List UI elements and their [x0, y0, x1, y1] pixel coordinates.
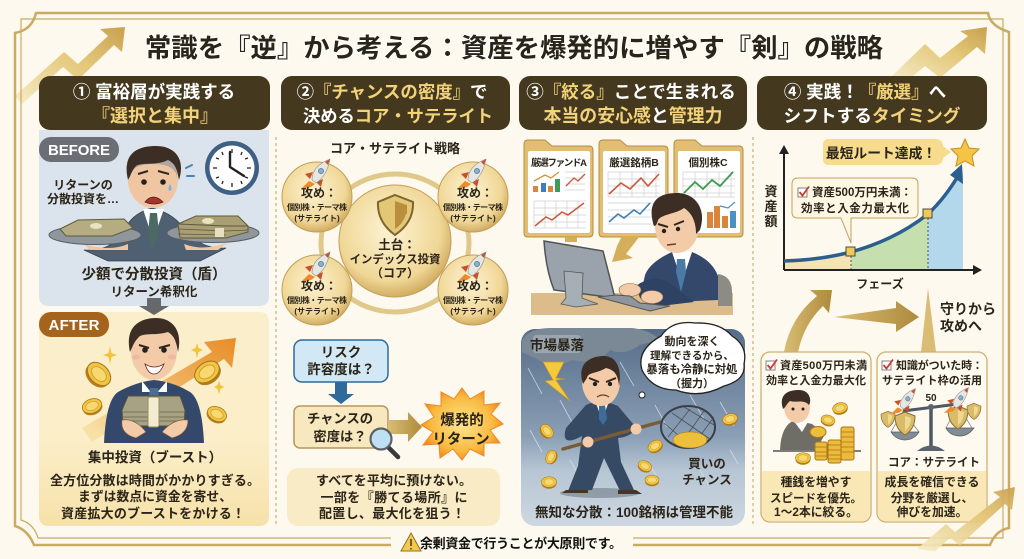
arrow: to explosive return [388, 412, 422, 442]
badge: after: AFTER [48, 317, 100, 334]
icon: magnifier [370, 428, 398, 457]
panel 1 header: 『選択と集中』 [92, 106, 218, 126]
burst: explosive return: リターン [432, 431, 490, 448]
keyboard [598, 295, 670, 311]
satellite top left: 個別株・テーマ株 [287, 202, 347, 212]
man with net [560, 356, 660, 498]
monitor [544, 241, 615, 307]
callout [792, 178, 918, 243]
folder A: 厳選ファンドA [531, 157, 587, 169]
caption box [287, 468, 500, 526]
folder C [674, 140, 743, 237]
box: risk tolerance [294, 340, 388, 382]
text: small diversification [82, 265, 226, 299]
satellite bottom right: 個別株・テーマ株 [443, 295, 503, 305]
core circle: 土台： [378, 237, 416, 252]
axis labels: 額 [764, 214, 778, 229]
balance scale: 50 [925, 393, 937, 404]
panel 3: folders and man [524, 140, 743, 315]
badge: after [39, 312, 109, 337]
bottom note: 余剰資金で行うことが大原則です。 [420, 536, 622, 551]
satellite top left [282, 159, 352, 232]
callout: 資産500万円未満： [812, 185, 912, 199]
label: market crash: 市場暴落 [530, 337, 584, 353]
pill: shortest route: 最短ルート達成！ [826, 145, 936, 161]
satellite top right: 個別株・テーマ株 [443, 202, 503, 212]
arrow: before to after [139, 298, 169, 315]
panel 2 header: ②『チャンスの密度』で [297, 82, 487, 102]
folder C: 個別株C [688, 156, 728, 169]
card: under 5M: スピードを優先。 [770, 491, 862, 505]
storm cloud [522, 328, 660, 365]
markers [846, 247, 855, 256]
card: under 5M [761, 352, 871, 522]
card: with knowledge: コア：サテライト [888, 456, 980, 469]
burst: explosive return [421, 388, 503, 460]
label: buying chance: チャンス [682, 473, 732, 487]
box: risk tolerance: 許容度は？ [307, 361, 375, 377]
panel 2 divider [275, 137, 277, 526]
satellite top right [438, 159, 508, 232]
caption box: すべてを平均に預けない。 [316, 473, 472, 488]
icon: star [951, 139, 979, 166]
card: under 5M: 資産500万円未満 [780, 358, 867, 372]
arrow: risk to density [328, 382, 354, 404]
phase fills [784, 252, 851, 270]
falling coins [537, 412, 739, 489]
panel 2 header [281, 76, 510, 130]
label: buying chance: 買いの [688, 457, 726, 471]
axis labels: 資 [764, 184, 778, 199]
rain [528, 355, 738, 484]
bottom note cover [391, 532, 633, 552]
title: 常識を『逆』から考える：資産を爆発的に増やす『剣』の戦略 [145, 33, 884, 63]
thought bubble: 理解できるから、 [650, 349, 734, 362]
caption: 無知な分散：100銘柄は管理不能 [535, 504, 734, 520]
burst: explosive return: 爆発的 [440, 411, 484, 429]
card: with knowledge [877, 352, 987, 522]
panel 4 header: ④ 実践！『厳選』へ [784, 82, 946, 102]
working man [619, 193, 718, 306]
panel 3 header [519, 76, 747, 130]
worried text: リターンの [53, 178, 113, 192]
satellite bottom left [282, 252, 352, 325]
panel 2 header: 決めるコア・サテライト [303, 106, 493, 126]
panel: market crash [521, 323, 745, 526]
worried text [47, 178, 119, 206]
card: with knowledge: 成長を確信できる [885, 475, 979, 489]
satellite top right: 攻め： [457, 185, 493, 200]
thought bubble [639, 323, 745, 398]
card: under 5M: 1〜2本に絞る。 [774, 505, 858, 519]
card: with knowledge: サテライト枠の活用 [882, 373, 982, 387]
folder B: 厳選銘柄B [609, 156, 659, 169]
panel: before [39, 130, 269, 306]
satellite top left: 攻め： [301, 185, 337, 200]
coins and sparkles [80, 343, 229, 426]
curve [784, 176, 958, 261]
connector spike [921, 288, 936, 352]
thought bubble: 動向を深く [664, 334, 720, 348]
satellite bottom left: (サテライト) [294, 307, 340, 316]
text: focus boost: 資産拡大のブーストをかける！ [61, 506, 245, 521]
panel: after [39, 312, 269, 526]
box: chance density: 密度は？ [313, 428, 367, 444]
panel: chart: フェーズ [856, 276, 904, 291]
panel: chart [764, 139, 982, 291]
satellite bottom left: 攻め： [301, 278, 337, 293]
label: defense to offense: 守りから [940, 301, 996, 317]
decorative arrow bottom right [917, 487, 1015, 551]
card: with knowledge: 分野を厳選し、 [891, 491, 973, 505]
box: risk tolerance: リスク [321, 345, 361, 360]
core circle [339, 185, 451, 297]
panel 4 header: シフトするタイミング [784, 105, 961, 126]
rising arrow [82, 338, 236, 442]
badge: before [39, 137, 119, 162]
icon: lightning [543, 362, 570, 401]
arrow: curved up [784, 290, 832, 352]
text: small diversification: 少額で分散投資（盾） [82, 265, 226, 283]
decorative arrow top left [15, 27, 125, 104]
panel 1 header: ① 富裕層が実践する [73, 82, 235, 102]
arrow: folder to monitor [565, 236, 640, 262]
desk [531, 293, 733, 315]
panel 4 divider [752, 137, 754, 526]
icon: clock [205, 141, 259, 195]
folder A [524, 140, 593, 237]
axis labels [764, 184, 778, 229]
worried man [84, 146, 226, 261]
panel 4 header [757, 76, 987, 130]
satellite bottom right [438, 252, 508, 325]
text: small diversification: リターン希釈化 [111, 284, 198, 299]
pill: shortest route [823, 139, 951, 165]
panel 3 header: ③『絞る』ことで生まれる [526, 82, 736, 102]
thought bubble: 暴落も冷静に対処 [646, 362, 738, 376]
card: with knowledge: 伸びを加速。 [897, 505, 967, 519]
core circle: インデックス投資 [350, 252, 441, 266]
label: buying chance [682, 457, 732, 487]
axis labels: 産 [764, 199, 778, 214]
label: defense to offense [940, 301, 996, 334]
satellite bottom left: 個別株・テーマ株 [287, 295, 347, 305]
balance scale [881, 388, 981, 451]
text: focus boost: まずは数点に資金を寄せ、 [78, 489, 232, 504]
chair [718, 274, 732, 306]
card: under 5M: 効率と入金力最大化 [766, 373, 866, 387]
chart title: コア・サテライト戦略 [330, 141, 460, 156]
label: defense to offense: 攻めへ [940, 318, 982, 334]
decorative arrow top right [892, 27, 987, 80]
text: focus boost: 集中投資（ブースト） [88, 449, 222, 465]
panel 3 header: 本当の安心感と管理力 [544, 105, 722, 126]
plates of cash [49, 216, 259, 250]
text: focus boost: 全方位分散は時間がかかりすぎる。 [50, 473, 260, 488]
ring [321, 174, 469, 312]
satellite bottom right: (サテライト) [450, 307, 496, 316]
card: under 5M: 種銭を増やす [781, 475, 852, 489]
axes [784, 150, 976, 270]
box: chance density [294, 406, 388, 448]
thought bubble: （握力） [670, 376, 714, 390]
panel 1 header [39, 76, 270, 130]
badge: before: BEFORE [48, 142, 110, 159]
callout: 効率と入金力最大化 [801, 201, 910, 215]
card: with knowledge: 知識がついた時： [896, 358, 983, 372]
net with coins [661, 406, 715, 448]
folder B [599, 140, 668, 237]
worried text: 分散投資を… [47, 191, 119, 206]
satellite top right: (サテライト) [450, 214, 496, 223]
arrow: shift right [834, 301, 919, 332]
happy man with cash [104, 318, 204, 443]
core circle: （コア） [371, 266, 419, 280]
caption box: 一部を『勝てる場所』に [320, 490, 468, 505]
satellite bottom right: 攻め： [457, 278, 493, 293]
satellite top left: (サテライト) [294, 214, 340, 223]
box: chance density: チャンスの [307, 411, 373, 426]
text: focus boost [50, 449, 260, 521]
caption box: 配置し、最大化を狙う！ [319, 506, 465, 521]
panel: core satellite [282, 141, 508, 526]
man and coin stacks [773, 390, 861, 465]
